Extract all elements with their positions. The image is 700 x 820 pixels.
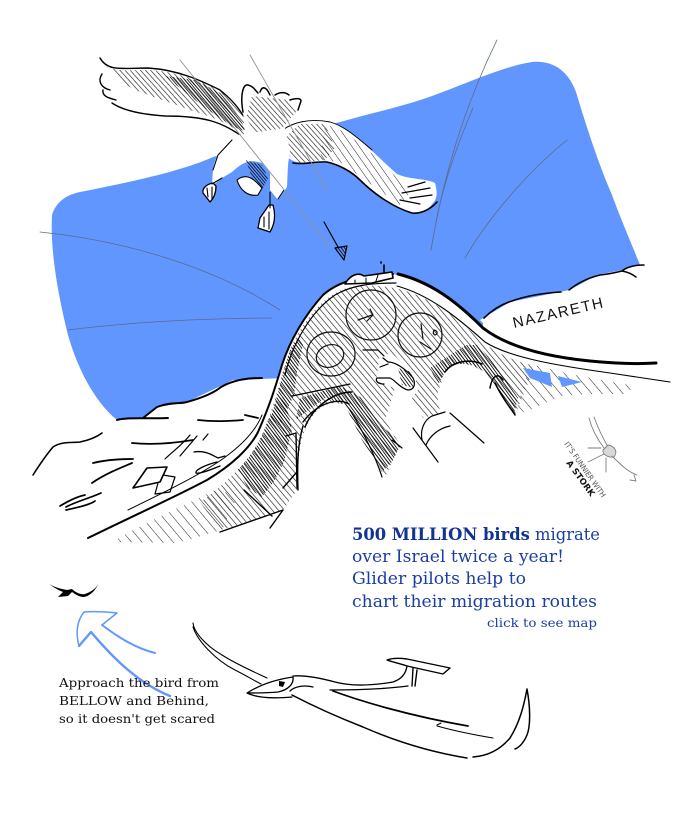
dial: altimeter (398, 313, 442, 357)
dial: compass (346, 290, 396, 340)
caption: a stork: A STORK (564, 459, 597, 499)
glider: tail (387, 658, 450, 686)
eagle: left wing (98, 58, 250, 137)
blue sky panel (52, 62, 640, 425)
approach caption: BELLOW and Behind, (59, 693, 209, 708)
eagle: tail feathers (242, 85, 301, 140)
label: Nazareth: NAZARETH (511, 295, 605, 332)
dark hatching: arch band (296, 386, 402, 472)
sparse hatching: lower left (112, 490, 238, 543)
pilot hand and sleeve (363, 350, 484, 470)
hill: Nazareth (480, 262, 700, 400)
windscreen frame (88, 274, 670, 538)
canopy top fitting (345, 262, 393, 284)
sparse hatching: right end (515, 364, 636, 415)
caption: funnier with: IT'S FUNNIER WITH (562, 440, 608, 499)
eagle: body and claws (203, 128, 290, 232)
gray sight lines over eagle (180, 55, 330, 247)
construction lines (40, 40, 567, 330)
dial: variometer (307, 332, 355, 376)
headline text block: Glider pilots help to (352, 569, 526, 588)
blue strips through glass (523, 368, 582, 387)
dark hatching: lower left pillar (238, 395, 292, 497)
icon: stork (588, 417, 637, 481)
approach caption: Approach the bird from (58, 675, 219, 690)
glider: far wing (193, 623, 267, 684)
note: stork sketch (562, 417, 637, 499)
approach caption: so it doesn't get scared (59, 711, 215, 726)
eagle (98, 58, 437, 232)
glider: fuselage (290, 666, 408, 691)
hill: left landscape (33, 378, 285, 542)
dark hatching: left pillar (270, 338, 303, 425)
headline text block: click to see map (487, 616, 597, 630)
approach caption (58, 675, 219, 726)
dark hatching: right arch (430, 345, 518, 414)
glider (193, 623, 530, 758)
small distant bird (49, 584, 98, 597)
headline text block: chart their migration routes (352, 592, 597, 611)
glider: near wing (292, 695, 467, 758)
glider: cockpit (247, 677, 293, 698)
blue approach arrow (77, 612, 170, 696)
eagle: right wing (278, 120, 437, 213)
instrument dials (307, 290, 442, 376)
headline text block: 500 MILLION birds migrate (352, 525, 600, 544)
instrument panel hatching (88, 274, 670, 560)
headline text block: over Israel twice a year! (352, 547, 564, 566)
direction arrow (324, 222, 347, 260)
headline text block (352, 525, 600, 630)
medium hatching: main panel (200, 286, 535, 530)
